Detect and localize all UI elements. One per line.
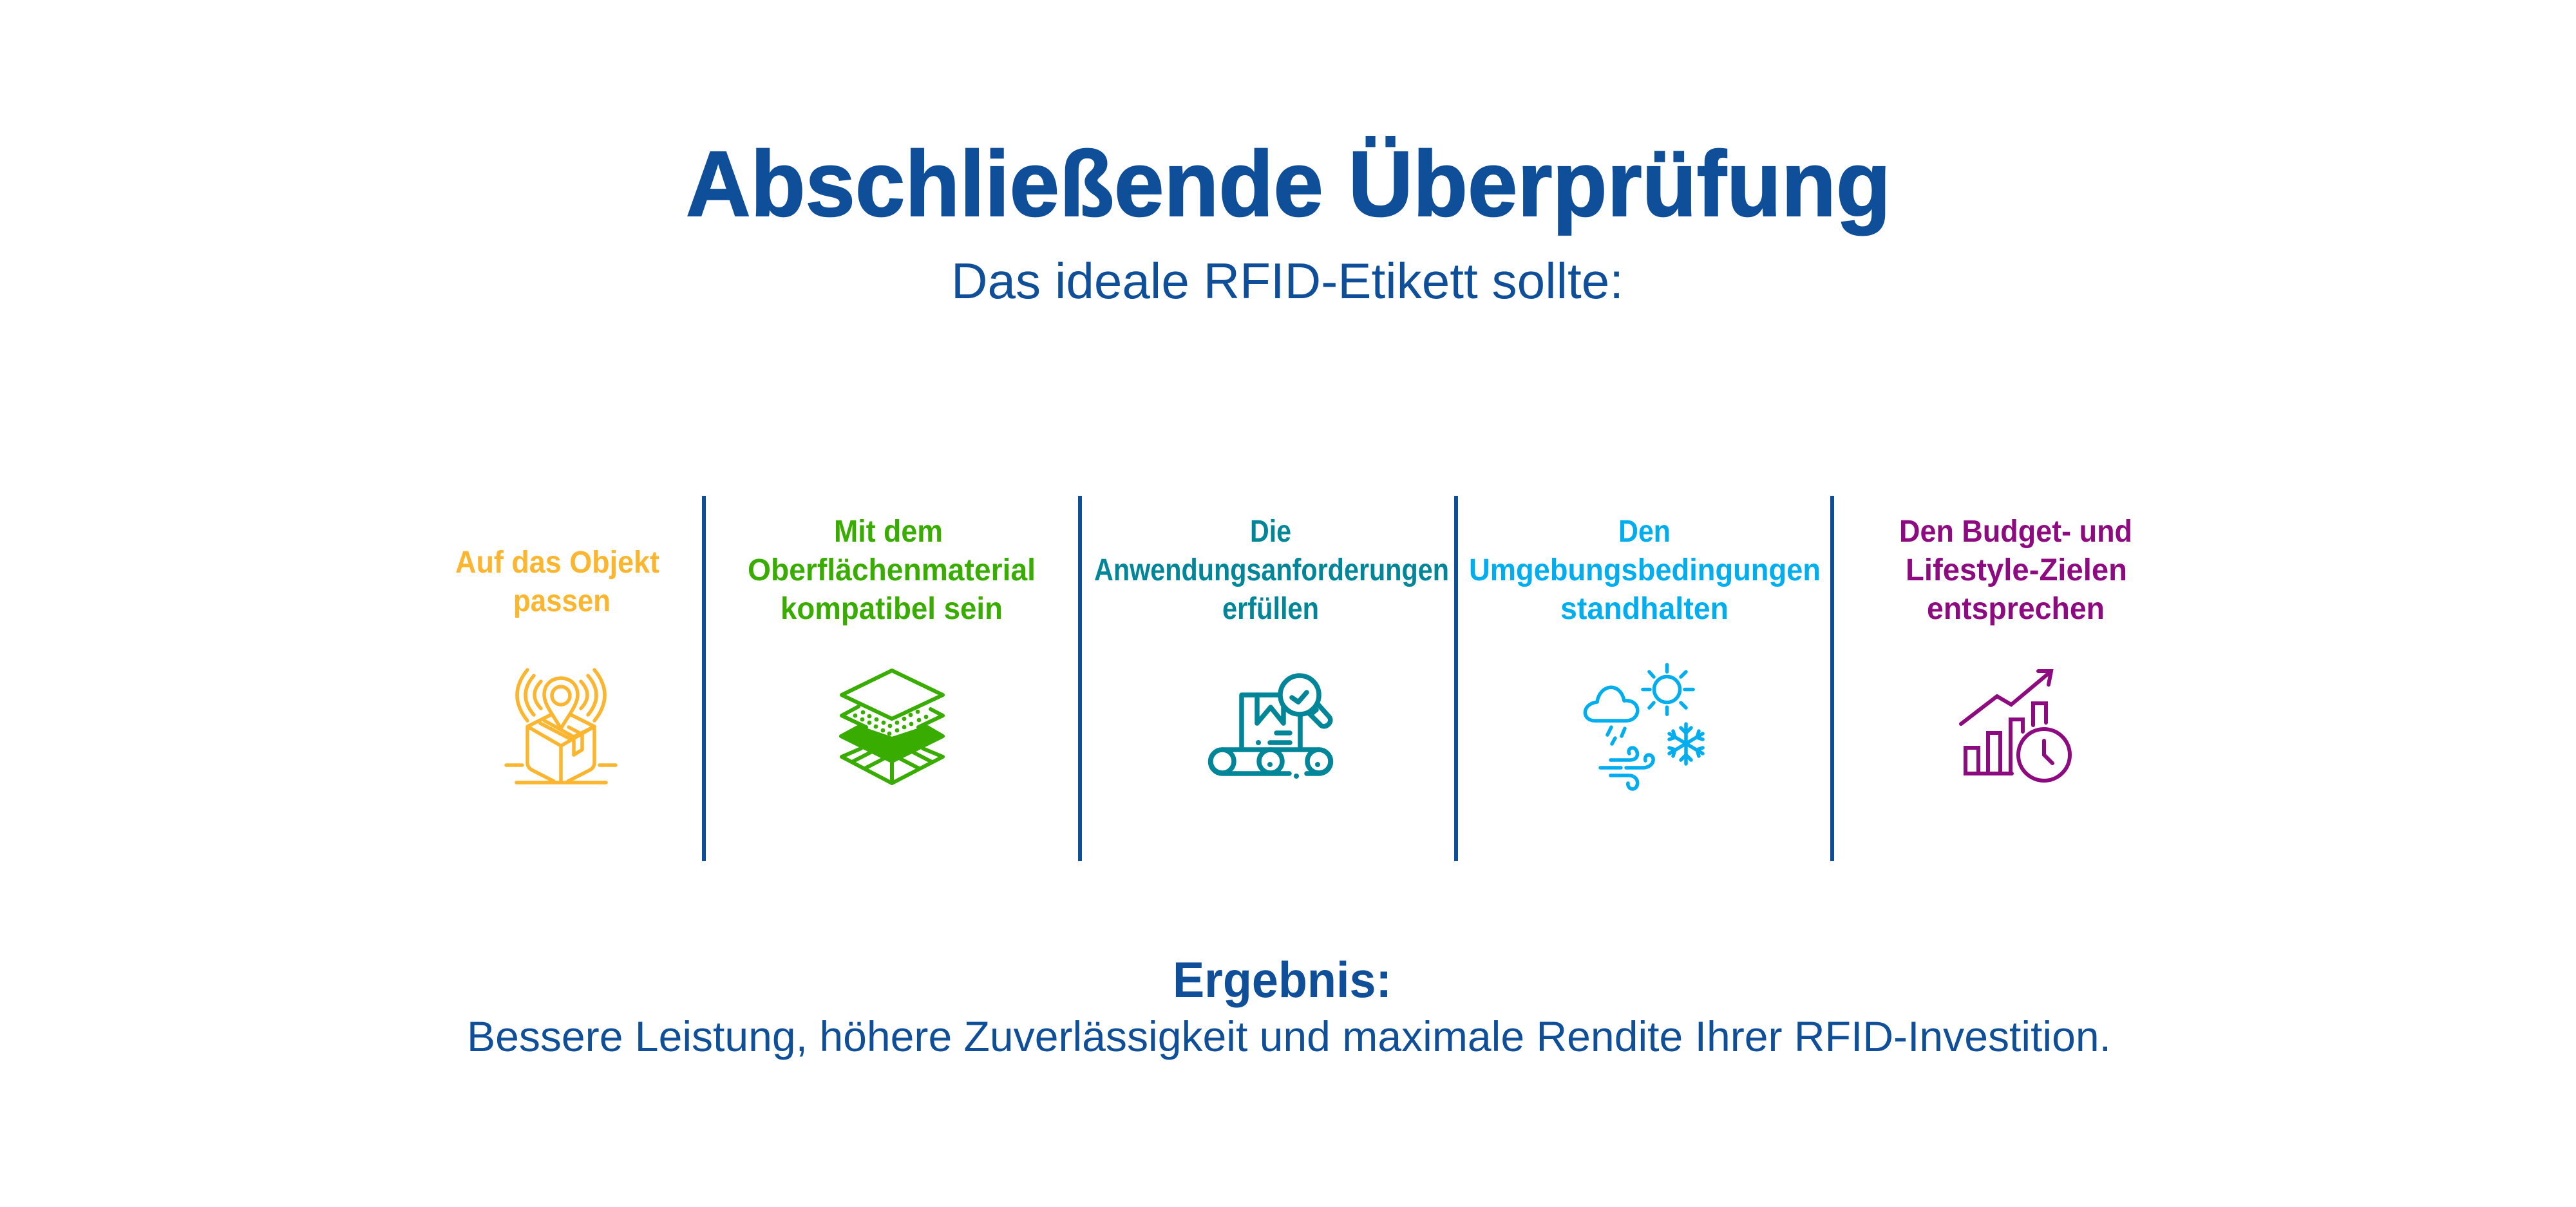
- label: Den Umgebungsbedingungen standhalten: Umgebungsbedingungen: [1469, 553, 1821, 587]
- label: Den Budget- und Lifestyle-Zielen entsprechen: Den Budget- und: [1899, 515, 2132, 549]
- result heading: Ergebnis:: [1173, 951, 1392, 1008]
- label: Den Budget- und Lifestyle-Zielen entsprechen: Lifestyle-Zielen: [1906, 553, 2127, 587]
- result text: Bessere Leistung, höhere Zuverlässigkeit und maximale Rendite Ihrer RFID-Investition.: [467, 1012, 2111, 1060]
- label: Die Anwendungsanforderungen erfüllen: [1094, 515, 1449, 626]
- label: Den Umgebungsbedingungen standhalten: standhalten: [1560, 592, 1728, 626]
- label: Auf das Objekt passen: passen: [513, 584, 611, 618]
- label: Mit dem Oberflächenmaterial kompatibel sein: kompatibel sein: [781, 592, 1003, 626]
- icon dots: adhesive texture: [853, 710, 928, 736]
- subtitle: Das ideale RFID-Etikett sollte:: [951, 252, 1624, 309]
- panel: Umgebungsbedingungen: [1469, 515, 1821, 789]
- icon dots: conveyor details: [1256, 740, 1320, 779]
- icon: material layers: [841, 670, 943, 783]
- label: Den Budget- und Lifestyle-Zielen entsprechen: [1899, 515, 2132, 626]
- label: Die Anwendungsanforderungen erfüllen: Die: [1250, 515, 1291, 549]
- panel: Budget und Lifestyle: [1899, 515, 2132, 781]
- label: Mit dem Oberflächenmaterial kompatibel sein: Mit dem: [834, 515, 943, 549]
- panel: Anwendungsanforderungen: [1094, 515, 1449, 779]
- label: Mit dem Oberflächenmaterial kompatibel sein: Oberflächenmaterial: [748, 553, 1036, 587]
- icon: conveyor with magnifier: [1211, 676, 1331, 774]
- label: Den Umgebungsbedingungen standhalten: [1469, 515, 1821, 626]
- icon: growth chart with clock: [1961, 671, 2070, 781]
- label: Den Budget- und Lifestyle-Zielen entsprechen: entsprechen: [1927, 592, 2105, 626]
- icon: box with location pin: [506, 670, 616, 783]
- label: Die Anwendungsanforderungen erfüllen: Anwendungsanforderungen: [1094, 553, 1449, 587]
- label: Die Anwendungsanforderungen erfüllen: erfüllen: [1222, 592, 1319, 626]
- label: Mit dem Oberflächenmaterial kompatibel sein: [748, 515, 1036, 626]
- panel: Auf das Objekt passen: [455, 546, 659, 783]
- label: Auf das Objekt passen: Auf das Objekt: [455, 546, 659, 580]
- title: Abschließende Überprüfung: [686, 132, 1891, 236]
- label: Den Umgebungsbedingungen standhalten: Den: [1618, 515, 1671, 549]
- label: Auf das Objekt passen: [455, 546, 659, 618]
- icon: weather sun cloud snow wind: [1585, 665, 1703, 789]
- panel: Oberflächenmaterial: [748, 515, 1036, 783]
